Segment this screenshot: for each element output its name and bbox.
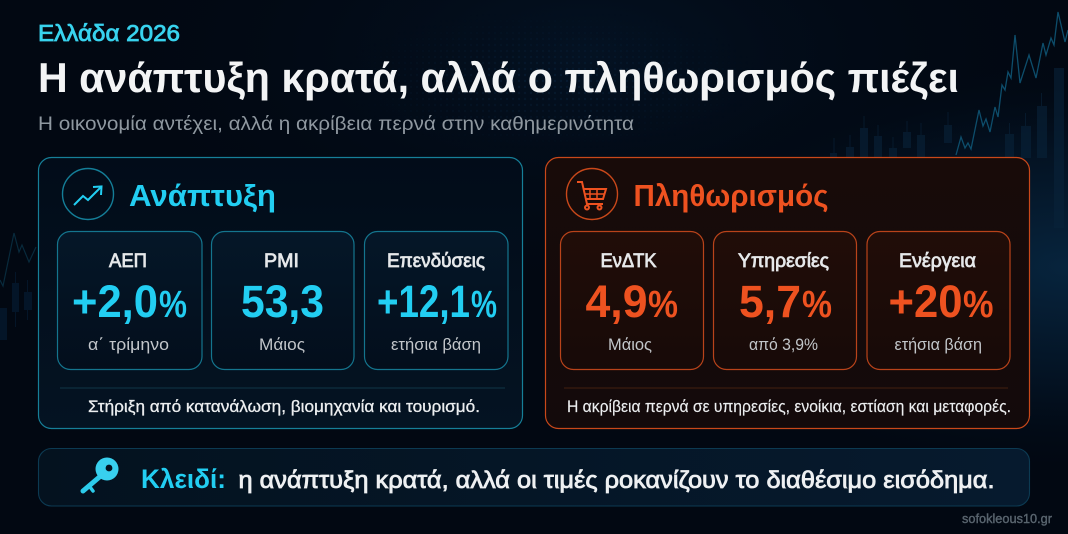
icon: shopping cart: [566, 168, 618, 220]
takeaway text: η ανάπτυξη κρατά, αλλά οι τιμές ροκανίζουν το διαθέσιμο εισόδημα.: [238, 467, 994, 494]
card: Υπηρεσίες: από 3,9%: [749, 335, 818, 354]
card: Επενδύσεις: +12,1: [377, 276, 470, 327]
key takeaway bar: [38, 448, 1030, 506]
panel: Πληθωρισμός: [546, 158, 1030, 428]
subtitle: Η οικονομία αντέχει, αλλά η ακρίβεια περνά στην καθημερινότητα: [38, 113, 634, 135]
icon: key: [83, 458, 118, 491]
card: Επενδύσεις: ετήσια βάση: [391, 335, 481, 354]
heading: Ανάπτυξη: Ανάπτυξη: [129, 178, 276, 213]
background: [374, 0, 1068, 414]
card: Επενδύσεις: %: [471, 284, 497, 326]
card: Επενδύσεις: [364, 232, 508, 370]
card: PMI: [212, 232, 354, 370]
card: ΑΕΠ: +2,0: [72, 276, 158, 327]
card: ΕνΔΤΚ: [560, 232, 704, 370]
card: ΑΕΠ: α΄ τρίμηνο: [88, 335, 169, 354]
card: PMI: 53,3: [241, 276, 324, 327]
card: Ενέργεια: %: [963, 284, 994, 326]
panel: Ανάπτυξη: [38, 158, 522, 428]
watermark: sofokleous10.gr: [962, 511, 1053, 526]
eyebrow: Ελλάδα 2026: Ελλάδα 2026: [38, 20, 180, 46]
card: Ενέργεια: +20: [888, 276, 962, 327]
card: PMI: PMI: [264, 251, 299, 272]
card: Υπηρεσίες: Υπηρεσίες: [738, 251, 829, 272]
title: Η ανάπτυξη κρατά, αλλά ο πληθωρισμός πιέζει: [38, 54, 959, 101]
card: ΕνΔΤΚ: 4,9: [586, 276, 648, 327]
card: PMI: Μάιος: [259, 335, 305, 354]
card: Ενέργεια: ετήσια βάση: [894, 335, 982, 354]
card: Υπηρεσίες: 5,7: [739, 276, 801, 327]
card: ΕνΔΤΚ: %: [648, 284, 678, 326]
label: Κλειδί: Κλειδί:: [141, 464, 226, 494]
card: Υπηρεσίες: %: [802, 284, 832, 326]
card: ΑΕΠ: %: [159, 284, 187, 326]
note: growth drivers: Στήριξη από κατανάλωση, βιομηχανία και τουρισμό.: [88, 398, 480, 416]
card: ΕνΔΤΚ: Μάιος: [608, 335, 652, 354]
card: Ενέργεια: Ενέργεια: [899, 251, 976, 272]
card: ΕνΔΤΚ: ΕνΔΤΚ: [600, 251, 657, 272]
card: Ενέργεια: [867, 232, 1010, 370]
card: ΑΕΠ: ΑΕΠ: [109, 251, 147, 272]
note: where inflation passes: Η ακρίβεια περνά σε υπηρεσίες, ενοίκια, εστίαση και μεταφορές.: [567, 398, 1011, 416]
background chart: candlesticks and rising line: [0, 12, 1068, 340]
card: Υπηρεσίες: [714, 232, 856, 370]
heading: Πληθωρισμός: Πληθωρισμός: [634, 178, 828, 213]
card: Επενδύσεις: Επενδύσεις: [387, 251, 485, 272]
icon: rising trend: [62, 168, 114, 220]
card: ΑΕΠ: [58, 232, 202, 370]
